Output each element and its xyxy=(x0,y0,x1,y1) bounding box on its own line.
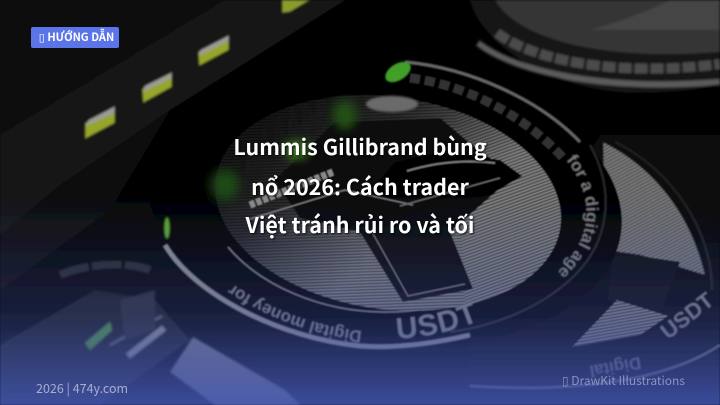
bottom left coin xyxy=(0,265,300,405)
coin rim lettering: for a digital age xyxy=(558,154,600,278)
coin rim lettering xyxy=(227,154,600,343)
green glows on coin xyxy=(211,100,357,200)
footer: site: 2026 | 474y.com xyxy=(36,378,128,397)
main coin xyxy=(149,60,622,350)
coin rim lettering: USDT xyxy=(396,302,474,340)
right coin: USDT xyxy=(656,287,719,344)
title: nổ 2026: Cách trader xyxy=(251,171,469,202)
badge: guide: ▯ HƯỚNG DẪN xyxy=(39,29,114,45)
footer: credit: ▯ DrawKit Illustrations xyxy=(562,372,685,389)
title: Việt tránh rủi ro và tối xyxy=(246,209,474,240)
coin rim lettering: Digital money for xyxy=(227,285,362,343)
inner face xyxy=(201,74,575,332)
title: Lummis Gillibrand bùng xyxy=(233,131,487,162)
top right coin xyxy=(470,0,720,93)
USDT logo xyxy=(247,118,522,302)
right coin: Digital xyxy=(588,353,643,381)
right coin xyxy=(470,135,720,405)
outer rim highlights xyxy=(405,62,580,142)
badge: guide xyxy=(31,27,119,48)
